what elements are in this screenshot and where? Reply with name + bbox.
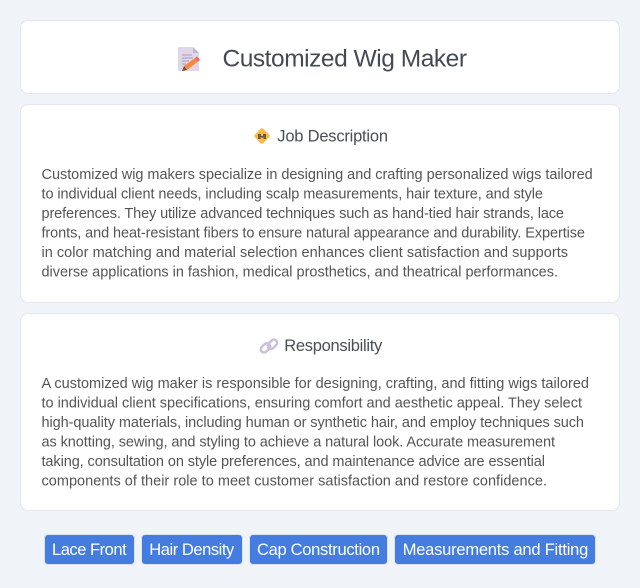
icon: orange diamond (254, 128, 270, 144)
title: Customized Wig Maker (222, 46, 467, 72)
text block: responsibility: as knotting, sewing, and styling to achieve a natural look. Accurate measurement (42, 434, 555, 450)
text block: job description: to individual client needs, including scalp measurements, hair texture, and style (42, 186, 543, 202)
tag: hair density (141, 534, 243, 565)
text block: responsibility: to individual client specifications, ensuring comfort and aesthetic appeal. They select (42, 396, 582, 412)
tag: lace front (44, 534, 135, 565)
text block: job description: preferences. They utilize advanced techniques such as hand-tied hair strands, lace (42, 206, 564, 222)
tag: cap construction (249, 534, 388, 565)
tag: lace front: Lace Front (52, 541, 127, 559)
panel: header (20, 20, 620, 94)
heading: responsibility: Responsibility (284, 337, 383, 355)
tag: measurements and fitting (394, 534, 596, 565)
heading: job description: Job Description (277, 128, 388, 146)
text block: responsibility: A customized wig maker is responsible for designing, crafting, and fitting wigs tailored (42, 376, 589, 392)
icon: document with pencil (178, 47, 200, 71)
icon: chain link (260, 338, 278, 354)
tag: measurements and fitting: Measurements and Fitting (403, 541, 588, 559)
text block: responsibility: taking, consultation on style preferences, and maintenance advice are essential (42, 454, 545, 470)
text block: job description: diverse applications in fashion, medical prosthetics, and theatrical performances. (42, 264, 558, 280)
text block: responsibility: high-quality materials, including human or synthetic hair, and employ techniques such (42, 415, 584, 431)
text block: responsibility: components of their role to meet customer satisfaction and restore confidence. (42, 474, 547, 490)
text block: job description: fronts, and heat-resistant fibers to ensure natural appearance and durability. Expertise (42, 226, 585, 242)
tag: hair density: Hair Density (149, 541, 235, 559)
text block: job description: in color matching and material selection enhances client satisfaction and supports (42, 245, 568, 261)
panel: responsibility (20, 313, 620, 511)
panel: job description (20, 104, 620, 303)
tag: cap construction: Cap Construction (257, 541, 380, 559)
text block: job description (42, 167, 593, 280)
text block: job description: Customized wig makers specialize in designing and crafting personalized wigs tailored (42, 167, 593, 183)
